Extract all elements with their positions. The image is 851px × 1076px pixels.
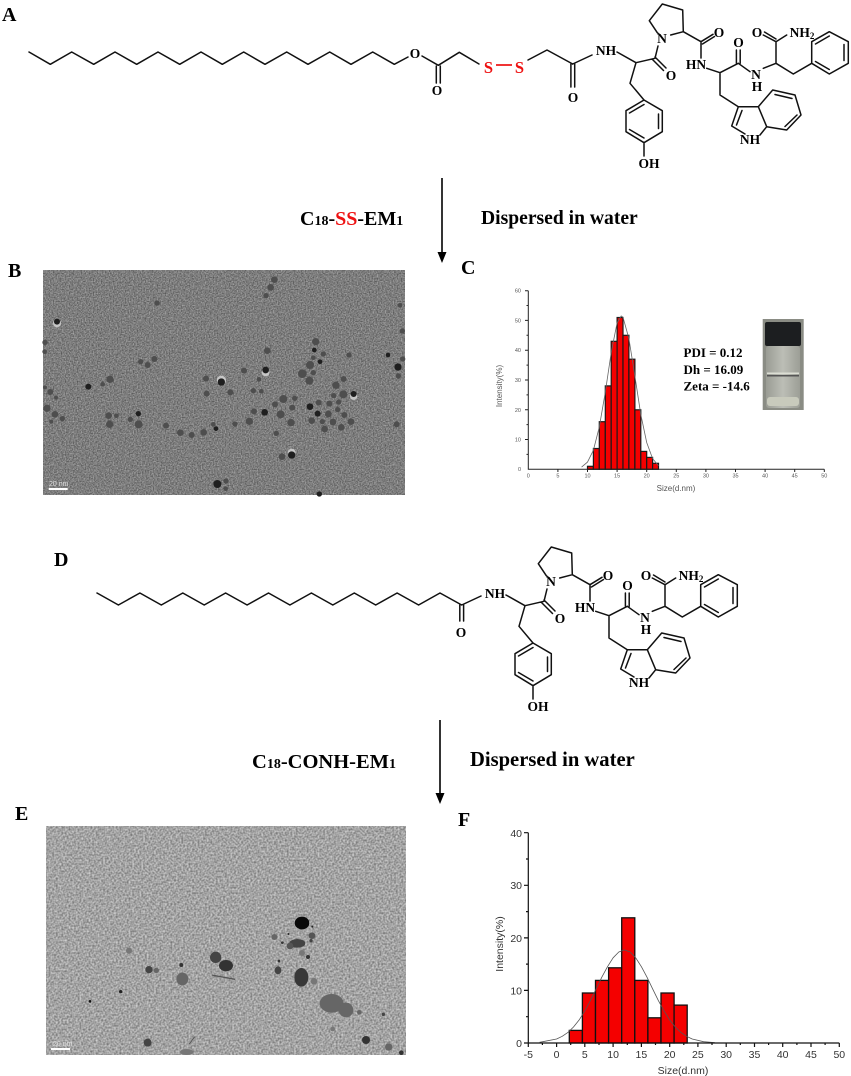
compound name: C18-CONH-EM1: C18-CONH-EM1 [252, 751, 396, 773]
fitted curve [540, 950, 715, 1043]
x axis labels: 40 [762, 474, 768, 480]
x axis labels: 0 [554, 1049, 560, 1061]
chemical structure: C18-CONH-EM1 [97, 547, 737, 714]
y axis labels: 10 [515, 438, 521, 444]
y axis labels: 10 [510, 986, 522, 998]
disulfide bond: S [515, 58, 524, 77]
peptide EM1: NH [485, 586, 506, 601]
panel label D: D [54, 549, 68, 571]
linker to peptide bonds [528, 50, 575, 87]
y axis labels: 30 [515, 378, 521, 384]
peptide EM1: O [733, 35, 744, 50]
fitted curve [582, 316, 658, 467]
y axis labels: 60 [515, 288, 521, 294]
alkyl chain [97, 593, 481, 605]
vial photograph [763, 319, 804, 410]
measurements: PDI, Dh, Zeta [684, 345, 750, 394]
compound name: C18-SS-EM1: C18-SS-EM1 [300, 208, 403, 230]
peptide EM1: NH [790, 25, 810, 40]
peptide EM1: H [641, 622, 652, 637]
carbonyl oxygen: O [432, 83, 442, 98]
scale bar 20 nm: 20 nm [49, 481, 69, 488]
x axis labels: 45 [805, 1049, 817, 1061]
axis title: Intensity: Intensity(%) [495, 365, 504, 407]
caption: dispersed in water: Dispersed in water [481, 208, 638, 229]
histogram bars [588, 318, 658, 469]
disulfide bond [484, 58, 524, 77]
peptide EM1: N [640, 610, 650, 625]
x axis labels: 50 [821, 474, 827, 480]
x axis labels [524, 1049, 845, 1061]
peptide EM1: N [546, 574, 556, 589]
panel label C: C [461, 257, 475, 279]
x axis labels: 15 [614, 474, 620, 480]
histogram bars [569, 918, 687, 1043]
axes [525, 291, 824, 472]
peptide EM1: O [603, 568, 613, 583]
x axis labels: 5 [582, 1049, 588, 1061]
peptide EM1: NH [679, 568, 699, 583]
x axis labels: 35 [749, 1049, 760, 1061]
peptide EM1: HN [686, 57, 706, 72]
measurements: PDI, Dh, Zeta: PDI = 0.12 [684, 345, 743, 360]
peptide EM1 [573, 4, 848, 171]
x axis labels: 25 [673, 474, 679, 480]
carbonyl bond [460, 605, 464, 621]
measurements: PDI, Dh, Zeta: Zeta = -14.6 [684, 378, 750, 394]
ester linker bonds [422, 52, 479, 83]
chemical structure: C18-SS-EM1 [29, 4, 848, 171]
panel label A: A [2, 4, 17, 26]
peptide EM1: O [752, 25, 762, 40]
panel B: TEM image [42, 270, 405, 497]
peptide EM1: O [714, 25, 724, 40]
y axis labels: 40 [515, 348, 521, 354]
peptide EM1: 2 [810, 31, 815, 41]
peptide EM1: NH [596, 43, 617, 58]
x axis labels: 0 [527, 474, 530, 480]
panel label F: F [458, 809, 470, 831]
peptide EM1: O [555, 611, 565, 626]
x axis labels: 50 [833, 1049, 845, 1061]
peptide EM1: 2 [699, 574, 704, 584]
x axis labels: 10 [584, 474, 591, 480]
measurements: PDI, Dh, Zeta: Dh = 16.09 [684, 362, 744, 377]
panel label B: B [8, 260, 21, 282]
x axis labels: 30 [720, 1049, 732, 1061]
y axis labels: 0 [516, 1038, 522, 1050]
y axis labels: 20 [515, 408, 521, 414]
y axis labels: 50 [515, 318, 521, 324]
y axis labels: 30 [510, 880, 522, 892]
x axis labels: 30 [703, 474, 709, 480]
TEM nanoparticles [42, 276, 405, 497]
x axis labels: 40 [777, 1049, 789, 1061]
y axis labels [510, 828, 522, 1050]
disulfide bond: S [484, 58, 493, 77]
x axis labels: -5 [524, 1049, 533, 1061]
peptide EM1: O [622, 578, 633, 593]
carbonyl oxygen: O [456, 625, 466, 640]
TEM nanoparticles [89, 917, 404, 1055]
peptide EM1: HN [575, 600, 595, 615]
x axis labels: 25 [692, 1049, 704, 1061]
panel label E: E [15, 803, 28, 825]
panel C: size distribution histogram [495, 288, 827, 493]
peptide EM1: OH [527, 699, 549, 714]
peptide EM1: N [657, 31, 667, 46]
x axis labels [527, 474, 827, 480]
axes [524, 833, 839, 1047]
panel E: TEM image [46, 826, 406, 1055]
axis title: Intensity: Intensity(%) [494, 916, 506, 972]
peptide EM1: O [666, 68, 676, 83]
panel F: size distribution histogram [494, 828, 845, 1076]
x axis labels: 15 [636, 1049, 647, 1061]
carbonyl oxygen: O [568, 90, 578, 105]
arrow: D to E [436, 720, 444, 804]
alkyl chain [29, 52, 408, 64]
peptide EM1: N [751, 67, 761, 82]
peptide EM1: NH [629, 675, 650, 690]
x axis labels: 20 [644, 474, 650, 480]
peptide EM1: O [641, 568, 651, 583]
y axis labels: 0 [518, 467, 521, 473]
axis title: Size: Size(d.nm) [657, 484, 696, 493]
peptide EM1: NH [740, 132, 761, 147]
x axis labels: 20 [664, 1049, 676, 1061]
y axis labels [515, 288, 521, 473]
caption: dispersed in water: Dispersed in water [470, 749, 635, 771]
x axis labels: 5 [556, 474, 559, 480]
peptide EM1: OH [638, 156, 660, 171]
scale bar: 20 nm [53, 1041, 73, 1048]
peptide EM1: H [752, 79, 763, 94]
y axis labels: 40 [510, 828, 522, 840]
peptide EM1 [485, 547, 737, 714]
y axis labels: 20 [510, 933, 522, 945]
x axis labels: 45 [792, 474, 798, 480]
ester oxygen: O [410, 46, 420, 61]
arrow: A to B [438, 178, 446, 263]
x axis labels: 10 [607, 1049, 619, 1061]
x axis labels: 35 [732, 474, 739, 480]
